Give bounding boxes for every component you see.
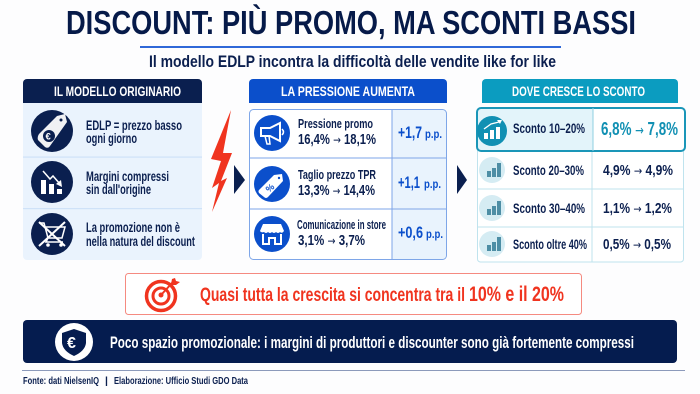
icon: lightning bolt bbox=[211, 110, 232, 212]
highlighted row: sconto 10-20%: Sconto 10–20% bbox=[513, 121, 585, 136]
icon: percent tag bbox=[254, 166, 290, 202]
panel heading: il modello originario bbox=[23, 79, 202, 103]
banner: poco spazio promozionale bbox=[23, 320, 677, 363]
row: sconto 20-30%: 4,9% → 4,9% bbox=[603, 163, 673, 179]
highlighted row: sconto 10-20%: 6,8% → 7,8% bbox=[601, 119, 678, 139]
row: pressione promo: Pressione promo bbox=[298, 116, 373, 131]
text: promozione: nella natura del discount bbox=[86, 234, 195, 249]
icon: euro shield: € bbox=[67, 335, 76, 352]
source footer: Fonte: dati NielsenIQ bbox=[23, 375, 99, 387]
icon: euro shield bbox=[55, 323, 93, 361]
value: +1,7 p.p.: p.p. bbox=[425, 127, 442, 141]
row: comunicazione: 3,1% → 3,7% bbox=[298, 233, 365, 249]
callout: growth concentration bbox=[126, 274, 582, 314]
source footer: Elaborazione: Ufficio Studi GDO Data bbox=[114, 375, 248, 387]
text: promozione bbox=[86, 220, 195, 249]
row: taglio prezzo bbox=[298, 167, 376, 199]
arrow: to pressure panel bbox=[234, 165, 245, 194]
row: sconto oltre 40% bbox=[479, 231, 671, 257]
row: sconto 30-40%: 1,1% → 1,2% bbox=[603, 201, 672, 217]
panel: la pressione aumenta bbox=[249, 79, 447, 260]
panel heading: il modello originario: IL MODELLO ORIGINARIO bbox=[54, 83, 181, 99]
value: +0,6 p.p.: p.p. bbox=[426, 227, 443, 241]
callout: growth concentration: 10% e il 20% bbox=[469, 283, 564, 306]
icon: rising bars bbox=[477, 116, 507, 146]
subtitle: Il modello EDLP incontra la difficoltà delle vendite like for like bbox=[149, 52, 556, 71]
row: taglio prezzo: 13,3% → 14,4% bbox=[298, 183, 375, 199]
icon: bars bbox=[479, 231, 505, 257]
panel heading: dove cresce lo sconto bbox=[482, 79, 678, 103]
icon: bars bbox=[479, 195, 505, 221]
row: sconto oltre 40%: 0,5% → 0,5% bbox=[603, 237, 671, 253]
text: margini bbox=[86, 169, 169, 197]
icon: percent tag: % bbox=[264, 182, 276, 194]
row: sconto 20-30% bbox=[479, 157, 673, 183]
panel heading: la pressione aumenta: LA PRESSIONE AUMENTA bbox=[281, 83, 415, 99]
text: promozione: La promozione non è bbox=[86, 220, 180, 235]
icon: crossed-out cart bbox=[31, 213, 73, 255]
icon: megaphone bbox=[254, 115, 290, 151]
icon: price tag with euro: € bbox=[46, 132, 52, 142]
row: taglio prezzo: Taglio prezzo TPR bbox=[298, 167, 376, 182]
row: sconto oltre 40%: Sconto oltre 40% bbox=[513, 237, 587, 252]
icon: price tag with euro bbox=[31, 110, 73, 152]
row: sconto 20-30%: Sconto 20–30% bbox=[513, 163, 584, 178]
row: sconto 30-40%: Sconto 30–40% bbox=[513, 201, 585, 216]
icon: store bbox=[254, 216, 290, 252]
icon: target bbox=[146, 278, 180, 310]
value: +1,1 p.p.: p.p. bbox=[424, 177, 441, 191]
text: margini: Margini compressi bbox=[86, 169, 169, 184]
value: +1,7 p.p.: +1,7 bbox=[398, 123, 422, 142]
panel: dove cresce lo sconto bbox=[477, 79, 685, 262]
panel heading: dove cresce lo sconto: DOVE CRESCE LO SCONTO bbox=[512, 83, 645, 99]
value: +0,6 p.p.: +0,6 bbox=[398, 223, 423, 242]
panel heading: la pressione aumenta bbox=[249, 79, 447, 103]
row: sconto 30-40% bbox=[479, 195, 672, 221]
text: margini: sin dall'origine bbox=[86, 182, 151, 197]
highlighted row: sconto 10-20% bbox=[477, 108, 685, 151]
arrow: to discount panel bbox=[457, 165, 467, 194]
icon: declining bars bbox=[31, 161, 73, 203]
row: comunicazione bbox=[297, 217, 386, 249]
row: pressione promo bbox=[298, 116, 376, 148]
icon: bars bbox=[479, 157, 505, 183]
text: edlp bbox=[86, 118, 182, 146]
row: pressione promo: 16,4% → 18,1% bbox=[298, 132, 376, 148]
source footer bbox=[23, 375, 248, 387]
row: comunicazione: Comunicazione in store bbox=[297, 217, 386, 232]
callout: growth concentration: Quasi tutta la crescita si concentra tra il bbox=[200, 285, 465, 306]
text: edlp: EDLP = prezzo basso bbox=[86, 118, 182, 133]
value: +1,1 p.p.: +1,1 bbox=[398, 173, 420, 192]
panel: il modello originario bbox=[23, 79, 202, 260]
source footer: | bbox=[105, 375, 108, 387]
text: edlp: ogni giorno bbox=[86, 131, 137, 146]
